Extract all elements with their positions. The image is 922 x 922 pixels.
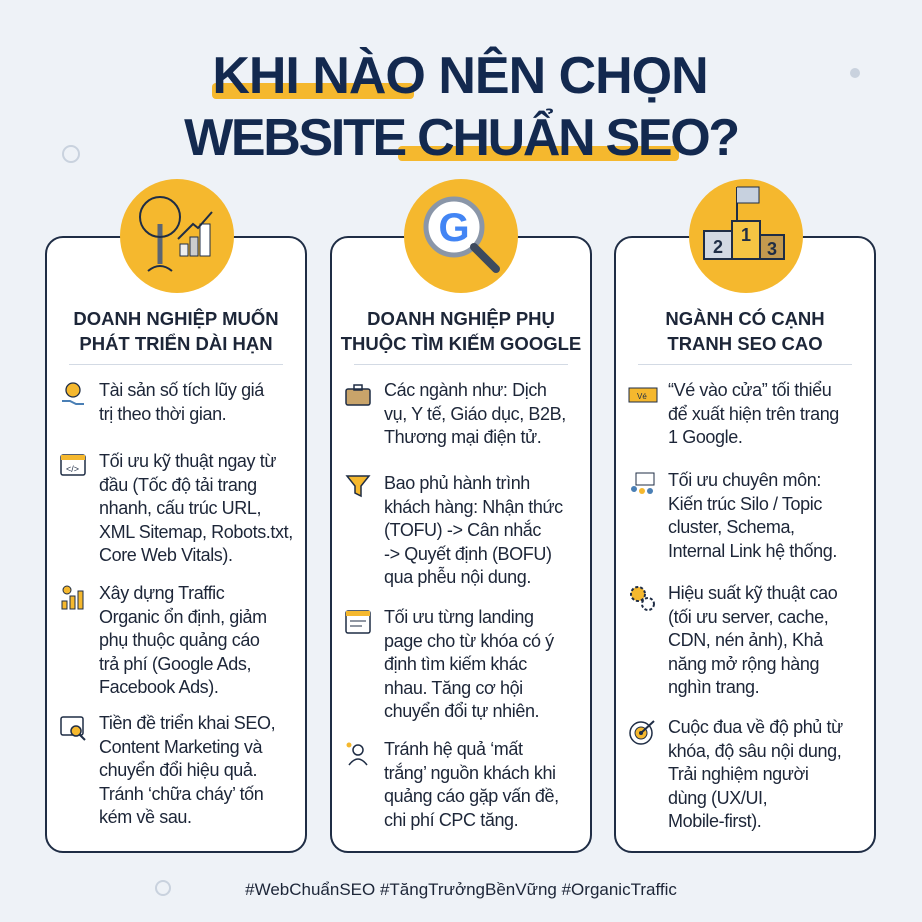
icon: target (629, 720, 655, 745)
item 3: Facebook Ads). (99, 677, 218, 697)
icon: team board (631, 472, 654, 494)
heading (73, 308, 279, 354)
item 4: Trải nghiệm người (668, 764, 808, 784)
item 3: (tối ưu server, cache, (668, 606, 828, 626)
item 4: khóa, độ sâu nội dung, (668, 740, 841, 760)
heading: TRANH SEO CAO (667, 333, 823, 354)
item 4: chi phí CPC tăng. (384, 810, 518, 830)
icon: gears (630, 586, 655, 611)
item 1: “Vé vào cửa” tối thiểu (668, 380, 831, 400)
item 4: kém về sau. (99, 807, 192, 827)
item 2: nhanh, cấu trúc URL, (99, 498, 261, 518)
item 2 (99, 451, 293, 565)
item 2 (668, 470, 837, 561)
item 2: -> Quyết định (BOFU) (384, 544, 552, 564)
heading (340, 308, 581, 354)
icon: podium: 3 (767, 239, 777, 259)
item 2: khách hàng: Nhận thức (384, 496, 563, 516)
item 3: Organic ổn định, giảm (99, 606, 267, 626)
hashtags: #WebChuẩnSEO #TăngTrưởngBềnVững #OrganicTraffic (245, 880, 677, 899)
icon: code window (60, 454, 86, 476)
item 1: để xuất hiện trên trang (668, 404, 839, 424)
item 2: (TOFU) -> Cân nhắc (384, 520, 541, 540)
item 3: chuyển đổi tự nhiên. (384, 701, 539, 721)
item 2: cluster, Schema, (668, 517, 795, 537)
icon: search doc (60, 716, 86, 741)
item 3: page cho từ khóa có ý (384, 630, 554, 650)
heading: DOANH NGHIỆP PHỤ (367, 308, 555, 329)
heading (665, 308, 825, 354)
icon: landing page (345, 610, 371, 634)
icon: google magnifier: G (438, 206, 470, 250)
heading: DOANH NGHIỆP MUỐN (73, 308, 279, 329)
item 4: trắng’ nguồn khách khi (384, 762, 556, 782)
item 2: Kiến trúc Silo / Topic (668, 494, 822, 514)
panel: google dependent (330, 236, 592, 853)
item 4: Cuộc đua về độ phủ từ (668, 717, 843, 737)
item 2: đầu (Tốc độ tải trang (99, 474, 257, 494)
icon: tree and chart (120, 179, 234, 293)
title highlight 1 (212, 83, 414, 99)
icon: briefcase (345, 384, 371, 406)
item 3 (99, 583, 267, 697)
icon: growth chart (62, 586, 84, 610)
item 3: năng mở rộng hàng (668, 654, 819, 674)
item 2: Tối ưu kỹ thuật ngay từ (99, 451, 276, 471)
item 1 (668, 380, 839, 447)
item 3: Hiệu suất kỹ thuật cao (668, 583, 837, 603)
item 1: Tài sản số tích lũy giá (99, 380, 264, 400)
item 4: Content Marketing và (99, 736, 262, 756)
heading: THUỘC TÌM KIẾM GOOGLE (341, 333, 581, 354)
item 3: nghìn trang. (668, 677, 759, 697)
item 4: Mobile-first). (668, 811, 761, 831)
item 3 (384, 607, 554, 721)
item 3: Tối ưu từng landing (384, 607, 534, 627)
item 1 (99, 380, 264, 424)
item 1 (384, 380, 566, 447)
heading: PHÁT TRIỂN DÀI HẠN (79, 333, 273, 354)
item 3: nhau. Tăng cơ hội (384, 678, 523, 698)
icon: ticket (628, 388, 658, 402)
item 1: 1 Google. (668, 427, 742, 447)
icon: podium: 2 (713, 237, 723, 257)
item 1: vụ, Y tế, Giáo dục, B2B, (384, 404, 566, 424)
item 4: quảng cáo gặp vấn đề, (384, 786, 559, 806)
item 3: phụ thuộc quảng cáo (99, 630, 260, 650)
item 3 (668, 583, 837, 697)
item 2: qua phễu nội dung. (384, 567, 531, 587)
item 2: Core Web Vitals). (99, 545, 233, 565)
item 2: XML Sitemap, Robots.txt, (99, 522, 293, 542)
panel: long-term growth (45, 236, 307, 853)
item 3: CDN, nén ảnh), Khả (668, 630, 823, 650)
item 4: dùng (UX/UI, (668, 788, 767, 808)
icon: code window: </> (66, 464, 79, 474)
decorative dots (62, 145, 80, 163)
icon: ticket: Vé (637, 392, 647, 401)
panel: high competition (614, 236, 876, 853)
title line 1: KHI NÀO NÊN CHỌN (212, 47, 708, 105)
icon: podium (689, 179, 803, 293)
icon: funnel (346, 475, 370, 498)
icon: podium: 1 (741, 225, 751, 245)
item 2: Tối ưu chuyên môn: (668, 470, 821, 490)
item 4: Tránh ‘chữa cháy’ tốn (99, 784, 263, 804)
item 4: chuyển đổi hiệu quả. (99, 760, 257, 780)
item 3: định tìm kiếm khác (384, 654, 527, 674)
item 4: Tránh hệ quả ‘mất (384, 739, 523, 759)
icon: person (346, 742, 368, 766)
item 4: Tiền đề triển khai SEO, (99, 713, 275, 733)
icon: coin hand (62, 382, 84, 405)
title line 2: WEBSITE CHUẨN SEO? (184, 109, 738, 167)
title highlight 2 (398, 146, 679, 161)
icon: google magnifier (404, 179, 518, 293)
item 2 (384, 473, 563, 587)
item 4 (384, 739, 559, 830)
item 3: Xây dựng Traffic (99, 583, 224, 603)
item 2: Bao phủ hành trình (384, 473, 530, 493)
item 4 (99, 713, 275, 827)
item 1: trị theo thời gian. (99, 404, 226, 424)
item 2: Internal Link hệ thống. (668, 540, 837, 560)
item 1: Thương mại điện tử. (384, 427, 541, 447)
item 4 (668, 717, 843, 831)
item 1: Các ngành như: Dịch (384, 380, 547, 400)
item 3: trả phí (Google Ads, (99, 654, 251, 674)
heading: NGÀNH CÓ CẠNH (665, 308, 825, 329)
